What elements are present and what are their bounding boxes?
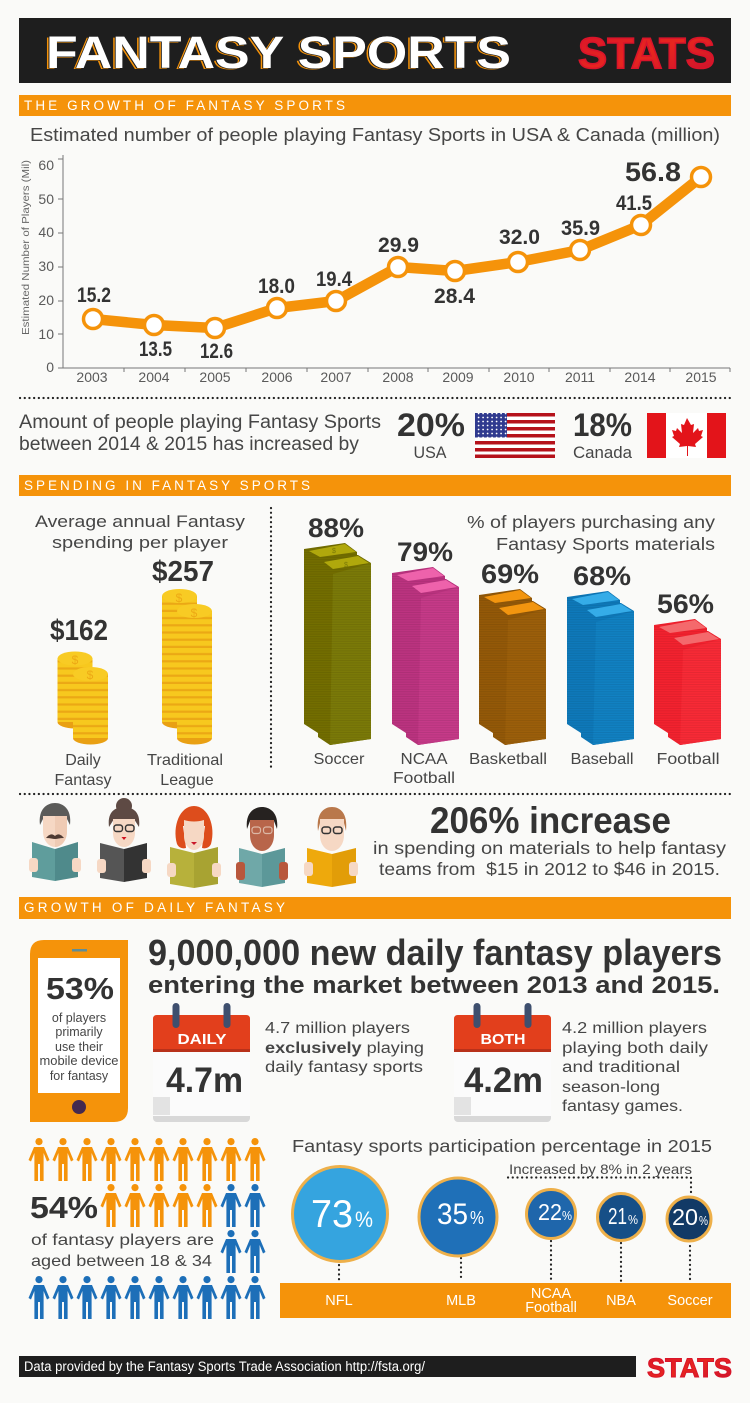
icon: Canada flag — [647, 413, 726, 458]
data labels: 12.6 — [200, 340, 233, 363]
bubble: NCAA football 22%: NCAA — [531, 1286, 571, 1302]
bubble: NBA 21% — [598, 1194, 644, 1309]
bar: soccer 88%: $ — [332, 548, 336, 555]
icon: daily coin stacks: $ — [72, 653, 79, 667]
daily description: exclusively playing — [265, 1040, 424, 1057]
data labels — [77, 157, 681, 363]
data labels: 13.5 — [139, 338, 172, 361]
bar: NCAA football 79% — [392, 537, 459, 787]
bar: basketball 69%: 69% — [481, 559, 539, 589]
increase note: Increased by 8% in 2 years — [509, 1161, 692, 1177]
axes: 30 — [38, 258, 54, 274]
daily description: daily fantasy sports — [265, 1059, 423, 1076]
title: FANTASY SPORTS — [46, 27, 511, 78]
phone text: use their — [55, 1040, 103, 1054]
icon: both calendar: 4.2m — [464, 1061, 543, 1100]
data labels: 35.9 — [561, 217, 600, 240]
panel heading: Average annual Fantasy — [35, 512, 246, 531]
axes: 50 — [38, 191, 54, 207]
206% increase callout: teams from $15 in 2012 to $46 in 2015. — [379, 859, 720, 879]
bar: football 56% — [654, 589, 721, 768]
axes: 10 — [38, 326, 54, 342]
bubble: NCAA football 22% — [525, 1190, 577, 1316]
bubble: NBA 21%: % — [628, 1212, 638, 1227]
growth statement — [19, 412, 381, 455]
axes: 2015 — [685, 369, 717, 385]
Canada stat: 18% — [573, 407, 632, 443]
daily description: 4.7 million players — [265, 1020, 410, 1037]
54% stat: 54% — [30, 1190, 98, 1225]
axes: 2005 — [199, 369, 231, 385]
STATS logo: STATS — [578, 29, 715, 78]
both description: season-long — [562, 1079, 660, 1096]
bubble: NBA 21%: NBA — [606, 1293, 636, 1309]
axes: 2008 — [382, 369, 414, 385]
both description: and traditional — [562, 1059, 680, 1076]
line chart — [20, 155, 730, 385]
participation chart — [280, 1136, 731, 1318]
headline: new daily fantasy players — [148, 932, 722, 999]
coin stack labels: Daily — [65, 752, 101, 769]
section heading: growth — [19, 95, 731, 116]
section heading: daily fantasy: GROWTH OF DAILY FANTASY — [24, 900, 285, 915]
blue figures — [28, 1184, 266, 1319]
axes: 2011 — [565, 369, 595, 385]
data line — [93, 177, 701, 328]
bar: NCAA football 79%: NCAA — [400, 751, 448, 768]
traditional league value: $257 — [152, 556, 214, 588]
panel heading: Fantasy Sports materials — [496, 534, 715, 554]
materials purchase panel — [304, 512, 721, 787]
bubble: NCAA football 22%: Football — [525, 1300, 577, 1316]
bar: NCAA football 79%: Football — [393, 770, 455, 787]
Canada stat: Canada — [573, 443, 633, 462]
section heading: growth: THE GROWTH OF FANTASY SPORTS — [24, 98, 345, 113]
phone callout — [30, 940, 128, 1122]
bar: soccer 88%: 88% — [308, 513, 364, 543]
54% stat — [30, 1190, 214, 1270]
daily description — [265, 1020, 424, 1076]
bar: soccer 88%: Soccer — [314, 751, 365, 768]
headline: new daily fantasy players: entering the market between 2013 and 2015. — [148, 972, 720, 999]
icon: traditional coin stacks: $ — [176, 591, 183, 605]
panel heading: % of players purchasing any — [467, 512, 715, 532]
bar: basketball 69% — [469, 559, 547, 768]
both description: fantasy games. — [562, 1098, 683, 1115]
title: FANTASY SPORTS — [44, 28, 509, 79]
axes: 20 — [38, 292, 54, 308]
icon: daily calendar: DAILY — [178, 1031, 226, 1048]
icon: traditional coin stacks — [162, 589, 212, 744]
bar: soccer 88% — [304, 513, 371, 768]
bar: football 56%: 56% — [657, 589, 714, 619]
reader 1 — [29, 803, 81, 881]
label band — [280, 1283, 731, 1318]
people pictogram — [28, 1138, 266, 1319]
axes: 2003 — [76, 369, 108, 385]
section heading: spending — [19, 475, 731, 496]
coin stack labels — [55, 752, 223, 789]
title: FANTASY SPORTS — [45, 28, 510, 78]
bar: soccer 88%: $ — [344, 562, 348, 569]
icon: daily coin stacks — [58, 652, 108, 744]
axes — [20, 155, 730, 385]
icon: daily calendar — [153, 1003, 250, 1122]
phone text: for fantasy — [50, 1069, 109, 1083]
coin stack labels: Traditional — [147, 752, 223, 769]
bubble: soccer 20%: % — [699, 1213, 708, 1228]
206% increase callout — [373, 800, 726, 879]
axes: 2009 — [442, 369, 474, 385]
phone text: of players — [52, 1011, 106, 1025]
axes: 2010 — [503, 369, 535, 385]
daily fantasy value: $162 — [50, 615, 108, 647]
206% increase callout: in spending on materials to help fantasy — [373, 838, 726, 858]
axes: 2004 — [138, 369, 170, 385]
bubble: NFL 73%: NFL — [325, 1293, 353, 1309]
icon: USA flag — [475, 413, 555, 458]
chart title: Estimated number of people playing Fantasy Sports in USA & Canada (million) — [30, 125, 720, 145]
phone text — [40, 1011, 119, 1083]
footer STATS logo: STATS — [647, 1353, 732, 1383]
data labels: 28.4 — [434, 285, 475, 308]
USA stat: USA — [414, 443, 447, 462]
both description: 4.2 million players — [562, 1020, 707, 1037]
icon: both calendar — [454, 1003, 551, 1122]
reader 4 — [236, 807, 288, 887]
headline: new daily fantasy players: 9,000,000 new daily fantasy players — [148, 932, 722, 973]
data points — [84, 168, 710, 338]
bar: basketball 69%: Basketball — [469, 751, 547, 768]
bubble: NFL 73%: % — [355, 1207, 373, 1232]
bubble: soccer 20%: 20 — [672, 1204, 698, 1230]
icon: daily calendar: 4.7m — [166, 1061, 243, 1100]
increase note — [508, 1161, 692, 1195]
54% stat: of fantasy players are — [31, 1232, 214, 1249]
USA stat: 20% — [397, 407, 465, 443]
reader 5 — [304, 807, 358, 887]
bar: baseball 68% — [567, 561, 634, 768]
bubble: soccer 20%: Soccer — [667, 1293, 713, 1309]
bar: baseball 68%: Baseball — [570, 751, 634, 768]
axes: 40 — [38, 224, 54, 240]
data labels: 41.5 — [616, 192, 652, 215]
icon: daily coin stacks: $ — [87, 668, 94, 682]
reader 3 — [167, 806, 221, 888]
Canada stat — [573, 407, 633, 462]
phone text: mobile device — [40, 1054, 119, 1068]
chart title: Fantasy sports participation percentage in 2015 — [292, 1136, 712, 1156]
axes: 2014 — [624, 369, 656, 385]
206% increase callout: 206% increase — [430, 800, 671, 841]
growth statement: Amount of people playing Fantasy Sports — [19, 412, 381, 433]
bar: football 56%: Football — [656, 751, 720, 768]
panel heading: spending per player — [52, 533, 228, 552]
data labels: 32.0 — [499, 226, 540, 249]
data labels: 29.9 — [378, 234, 419, 257]
bar: NCAA football 79%: 79% — [397, 537, 453, 567]
data labels: 19.4 — [316, 268, 352, 291]
bubble: MLB 35% — [419, 1178, 497, 1309]
icon: traditional coin stacks: $ — [191, 606, 198, 620]
both description: playing both daily — [562, 1040, 708, 1057]
data labels: 18.0 — [258, 275, 295, 298]
axes: 2006 — [261, 369, 293, 385]
bubble: NCAA football 22%: % — [562, 1208, 572, 1223]
header banner — [19, 18, 731, 83]
data labels: 15.2 — [77, 284, 111, 307]
reader 2 — [97, 798, 151, 882]
phone callout: 53% — [46, 971, 114, 1006]
bubble: MLB 35%: MLB — [446, 1293, 476, 1309]
growth statement: between 2014 & 2015 has increased by — [19, 434, 359, 455]
bubble: soccer 20% — [667, 1197, 713, 1309]
bubble: MLB 35%: 35 — [437, 1198, 468, 1231]
both description — [562, 1020, 708, 1115]
coin stack labels: League — [160, 772, 214, 789]
USA stat — [397, 407, 465, 462]
bar: baseball 68%: 68% — [573, 561, 631, 591]
icon: phone — [30, 940, 128, 1122]
bubble: MLB 35%: % — [470, 1208, 484, 1228]
bubble: NCAA football 22%: 22 — [538, 1199, 562, 1225]
axes: 0 — [46, 359, 54, 375]
panel heading — [467, 512, 715, 554]
bubble: NBA 21%: 21 — [608, 1203, 627, 1229]
icon: both calendar: BOTH — [480, 1031, 526, 1048]
axes: Estimated Number of Players (Mil) — [20, 160, 32, 335]
orange figures — [28, 1138, 266, 1227]
footer source bar: Data provided by the Fantasy Sports Trade Association http://fsta.org/ — [24, 1359, 425, 1374]
spending per player panel — [35, 512, 246, 789]
54% stat: aged between 18 & 34 — [31, 1253, 212, 1270]
icon: readers — [29, 798, 358, 888]
footer source bar — [19, 1356, 636, 1377]
section heading: daily fantasy — [19, 897, 731, 919]
axes: 2007 — [320, 369, 352, 385]
panel heading — [35, 512, 246, 552]
bubble: NFL 73%: 73 — [311, 1193, 353, 1236]
phone text: primarily — [55, 1025, 103, 1039]
bubble: NFL 73% — [292, 1166, 388, 1309]
coin stack labels: Fantasy — [55, 772, 111, 789]
section heading: spending: SPENDING IN FANTASY SPORTS — [24, 478, 310, 493]
data labels: 56.8 — [625, 157, 681, 187]
axes: 60 — [38, 157, 54, 173]
